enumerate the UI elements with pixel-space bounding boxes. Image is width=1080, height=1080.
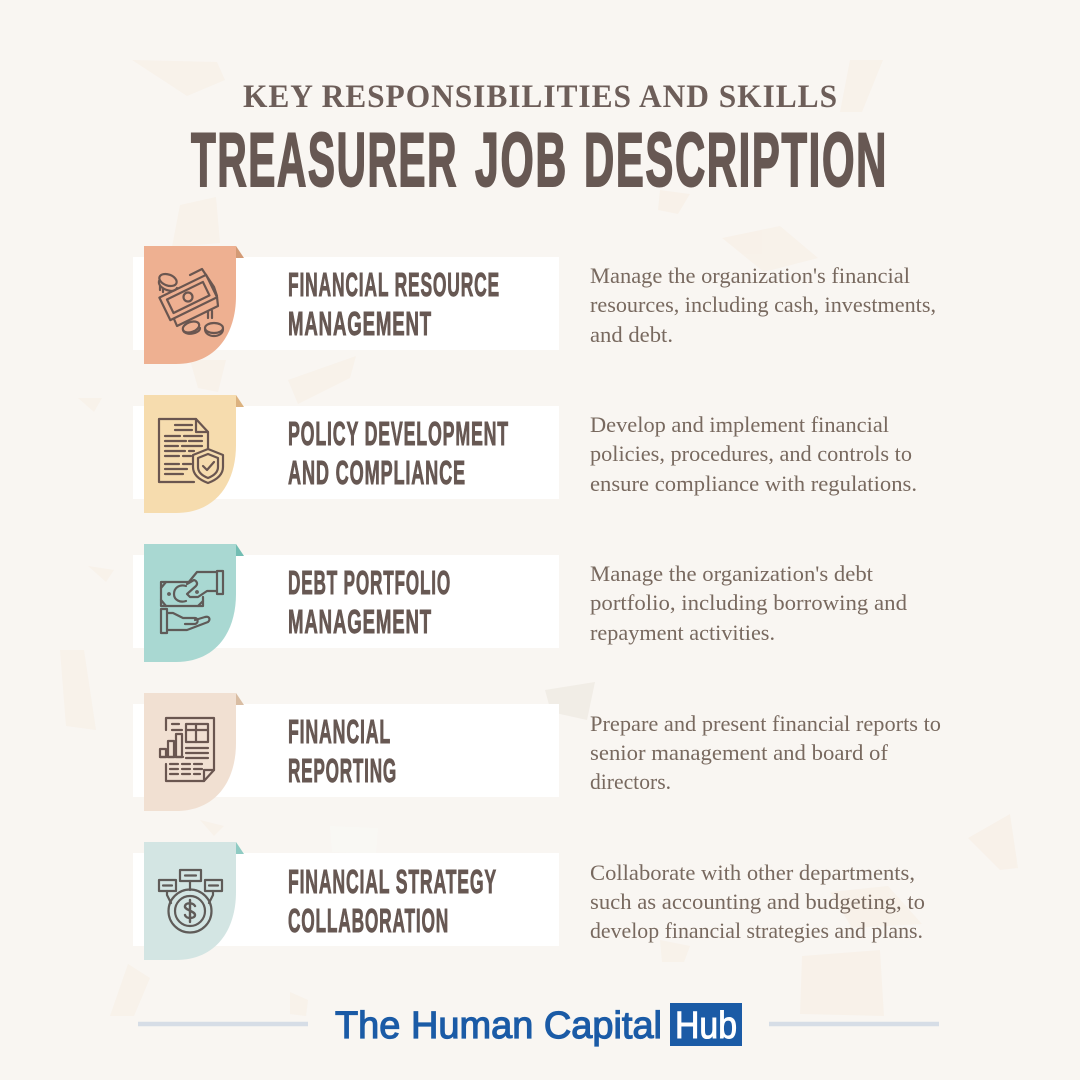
heading bbox=[288, 713, 397, 789]
label band bbox=[133, 406, 559, 499]
heading: DEBT PORTFOLIO bbox=[288, 564, 451, 601]
description bbox=[590, 561, 907, 645]
panel: financial strategy collaboration bbox=[133, 842, 925, 960]
tab bbox=[144, 395, 244, 513]
heading: FINANCIAL STRATEGY bbox=[288, 863, 497, 900]
heading: FINANCIAL RESOURCE bbox=[288, 266, 500, 303]
description: develop financial strategies and plans. bbox=[590, 918, 923, 943]
logo: Hub bbox=[675, 1005, 737, 1047]
description: resources, including cash, investments, bbox=[590, 292, 936, 317]
panel: policy development and compliance bbox=[133, 395, 917, 513]
tab bbox=[144, 842, 244, 960]
description bbox=[590, 860, 925, 943]
label band bbox=[133, 704, 559, 797]
description: Manage the organization's debt bbox=[590, 561, 873, 586]
heading: MANAGEMENT bbox=[288, 305, 432, 342]
description bbox=[590, 412, 917, 496]
description bbox=[590, 711, 941, 794]
heading: REPORTING bbox=[288, 752, 397, 789]
description: Prepare and present financial reports to bbox=[590, 711, 941, 736]
heading bbox=[288, 266, 500, 342]
icon: hands exchanging money bbox=[161, 571, 223, 633]
icon: money bbox=[158, 269, 223, 336]
logo: The Human Capital bbox=[335, 1005, 662, 1047]
heading: POLICY DEVELOPMENT bbox=[288, 415, 509, 452]
description: policies, procedures, and controls to bbox=[590, 441, 912, 466]
tab bbox=[144, 693, 244, 811]
description: and debt. bbox=[590, 322, 673, 347]
description: Develop and implement financial bbox=[590, 412, 889, 437]
heading bbox=[288, 415, 509, 491]
panel: financial reporting bbox=[133, 693, 941, 811]
heading: FINANCIAL bbox=[288, 713, 391, 750]
icon: report bbox=[160, 718, 214, 781]
icon: strategy coin bbox=[159, 870, 222, 932]
icon: document with shield bbox=[159, 419, 223, 483]
heading bbox=[288, 863, 497, 939]
panel: financial resource management bbox=[133, 246, 936, 364]
heading bbox=[288, 564, 451, 640]
title: JOB bbox=[475, 118, 568, 203]
description: portfolio, including borrowing and bbox=[590, 590, 907, 615]
heading: AND COMPLIANCE bbox=[288, 454, 466, 491]
description: repayment activities. bbox=[590, 620, 775, 645]
heading: COLLABORATION bbox=[288, 902, 449, 939]
description: such as accounting and budgeting, to bbox=[590, 889, 925, 914]
label band bbox=[133, 853, 559, 946]
description bbox=[590, 263, 936, 347]
tab bbox=[144, 246, 244, 364]
label band bbox=[133, 555, 559, 648]
tab bbox=[144, 544, 244, 662]
panel: debt portfolio management bbox=[133, 544, 907, 662]
description: directors. bbox=[590, 769, 671, 794]
description: senior management and board of bbox=[590, 740, 889, 765]
description: Collaborate with other departments, bbox=[590, 860, 915, 885]
description: ensure compliance with regulations. bbox=[590, 471, 917, 496]
description: Manage the organization's financial bbox=[590, 263, 910, 288]
heading: MANAGEMENT bbox=[288, 603, 432, 640]
title: TREASURER bbox=[191, 118, 458, 203]
subtitle: KEY RESPONSIBILITIES AND SKILLS bbox=[243, 79, 838, 115]
label band bbox=[133, 257, 559, 350]
